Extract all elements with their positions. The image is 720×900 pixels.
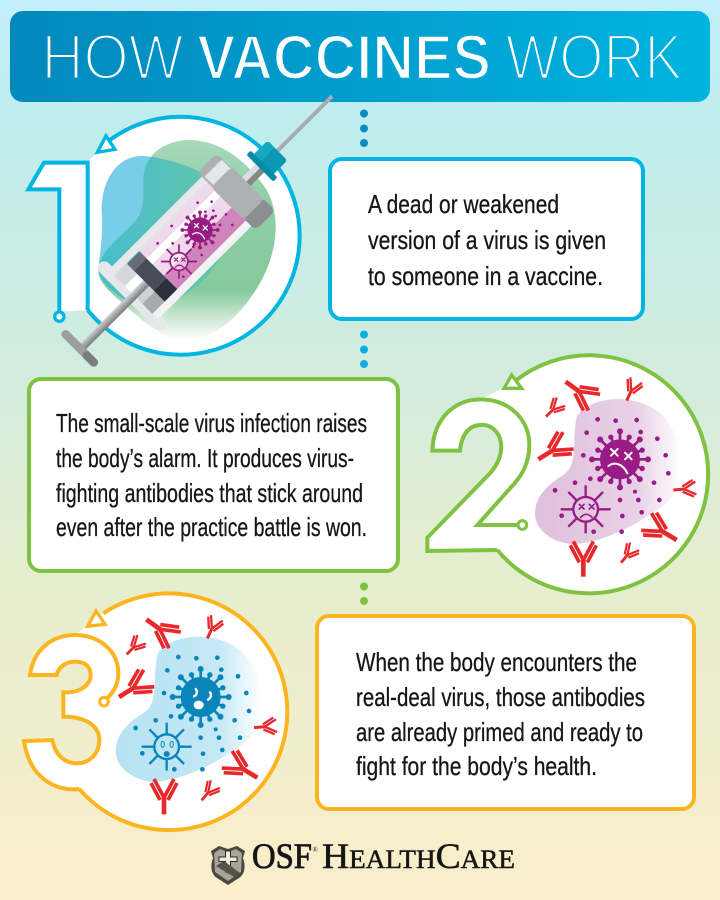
numeral 2 outline [427,399,529,551]
panel: step 1 text [330,159,643,319]
title banner: HOW [42,21,184,93]
neck [242,160,263,182]
step 2 numeral and circle [427,355,708,593]
connector dots: middle [360,330,368,368]
panel: step 3 text [317,616,694,809]
particles 2 [553,417,671,534]
syringe viruses [156,200,234,279]
panel: step 2 text: The small-scale virus infection raises [56,408,367,438]
dead virus large [180,210,220,250]
antibodies 3 [112,609,277,814]
panel: step 3 text: real-deal virus, those antibodies [356,682,645,712]
stem end dot 2 [518,521,527,529]
panel: step 3 text: When the body encounters the [356,647,637,677]
flange [95,259,169,333]
panel: step 2 text: even after the practice battle is won. [56,512,367,542]
antibodies 2 [531,371,697,577]
ring 2 [497,355,708,593]
large dead virus [589,428,651,490]
panel: step 1 text: A dead or weakened [368,189,559,219]
numeral 3 outline [24,635,118,789]
large happy virus [170,666,232,728]
small dead virus [561,485,611,533]
dead virus small [161,244,197,279]
green blob [98,140,276,340]
syringe particles [156,200,234,278]
title banner [10,11,710,102]
wordmark: OSF [252,836,312,876]
wordmark: HEALTHCARE [322,836,515,876]
stem end dot 1 [55,312,64,321]
panel: step 2 text [29,379,398,571]
arrowhead 1 [97,136,115,152]
needle [271,95,334,158]
hub [246,137,291,182]
panel: step 2 text: the body’s alarm. It produces virus- [56,443,354,473]
panel: step 1 text: to someone in a vaccine. [368,261,603,291]
logo: OSF HealthCare [211,836,515,885]
stem end dot 3 [100,697,108,706]
connector dots: top [360,110,368,147]
panel: step 3 text: fight for the body’s health. [356,751,597,781]
arrowhead 2 [504,375,522,388]
ring 3 [79,593,287,830]
blue blob 3 [116,637,261,782]
blue blob [98,156,232,306]
connector dots: lower [360,582,368,605]
arrowhead 3 [88,611,105,626]
step 3 numeral and circle [24,593,287,830]
barrel [109,175,253,319]
panel: step 2 text: fighting antibodies that stick around [56,478,363,508]
panel: step 1 text: version of a virus is given [368,225,606,255]
syringe cap [197,153,275,231]
small surprised virus [142,723,192,771]
particles 3 [133,655,251,772]
numeral 1 outline and ring [28,163,88,312]
purple blob [535,399,681,544]
rubber stopper [127,252,177,301]
T handle [60,328,100,368]
step 1 numeral and circle [28,117,300,355]
plunger rod [77,279,150,352]
panel: step 3 text: are already primed and ready to [356,717,643,747]
syringe [44,64,364,384]
cluster 3 [112,609,277,814]
teal blob overlap [98,156,220,304]
title banner: WORK [506,21,682,93]
icon: shield crest [211,846,245,885]
wordmark: ® [312,846,318,854]
title banner: VACCINES [197,23,491,93]
